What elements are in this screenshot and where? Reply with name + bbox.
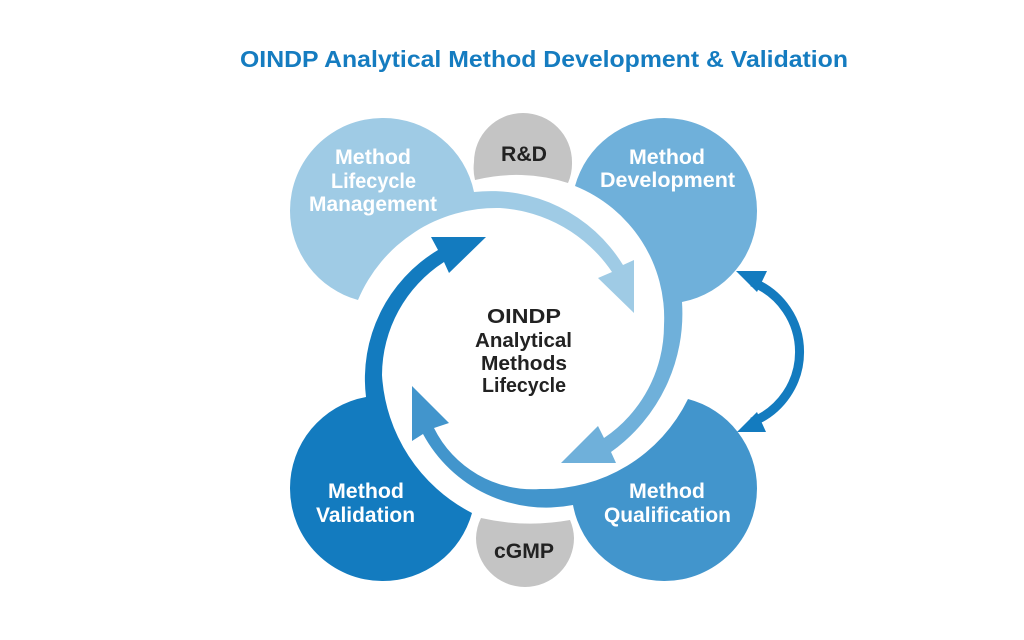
panel: Method Development with arrow: Development (600, 169, 735, 192)
center label: Analytical (475, 330, 572, 352)
title: OINDP Analytical Method Development & Validation (240, 46, 848, 72)
center label: Methods (481, 353, 567, 375)
panel: Method Development with arrow: Method (629, 146, 705, 169)
panel: Method Lifecycle Management with arrow: Management (309, 193, 437, 216)
center label: Lifecycle (482, 375, 566, 397)
panel: cGMP badge (476, 518, 574, 587)
panel: Method Lifecycle Management with arrow (290, 118, 634, 313)
panel: Method Lifecycle Management with arrow: Lifecycle (331, 170, 416, 193)
panel: Method Development with arrow (561, 118, 757, 463)
panel: R&D badge: R&D (501, 143, 547, 166)
panel: Method Qualification with arrow (412, 386, 757, 581)
panel: cGMP badge: cGMP (494, 540, 554, 563)
panel: Method Lifecycle Management with arrow: Method (335, 146, 411, 169)
panel: Method Validation with arrow (290, 237, 486, 581)
panel: Method Validation with arrow: Method (328, 480, 404, 503)
panel: R&D badge (474, 113, 572, 183)
arrow: two-way between development and qualification (736, 271, 800, 432)
center label (475, 306, 572, 397)
panel: Method Qualification with arrow: Qualification (604, 504, 731, 527)
panel: Method Qualification with arrow: Method (629, 480, 705, 503)
panel: Method Validation with arrow: Validation (316, 504, 415, 527)
center label: OINDP (487, 306, 561, 328)
